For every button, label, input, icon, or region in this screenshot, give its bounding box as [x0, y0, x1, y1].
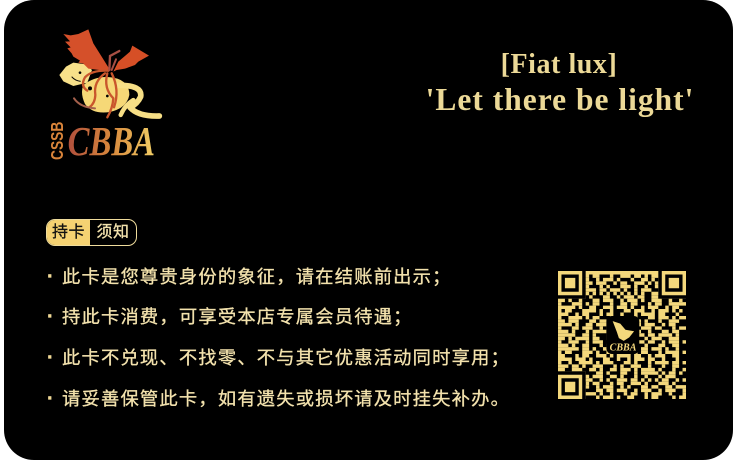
logo vertical tag: CSSB [47, 122, 67, 160]
notice line 2: 持此卡消费，可享受本店专属会员待遇； [62, 306, 413, 327]
notice line 2: · [47, 306, 54, 328]
notice line 3: 此卡不兑现、不找零、不与其它优惠活动同时享用； [62, 347, 510, 368]
phoenix left wing [63, 29, 109, 71]
QR centre logo: CBBA [610, 343, 637, 354]
notice line 1: 此卡是您尊贵身份的象征，请在结账前出示； [62, 266, 452, 287]
logo wordmark: CBBA [68, 119, 155, 165]
phoenix right wing [113, 46, 149, 72]
QR code [558, 271, 686, 399]
notice line 3: · [47, 347, 54, 369]
title: Let there be light: 'Let there be light' [426, 82, 694, 117]
notice line 1: · [47, 266, 54, 288]
notice line 4: · [47, 388, 54, 410]
logo: phoenix and CBBA [47, 29, 162, 165]
QR finder patterns [558, 271, 686, 399]
notice line 4: 请妥善保管此卡，如有遗失或损坏请及时挂失补办。 [62, 388, 510, 409]
phoenix tentacles [74, 51, 119, 117]
badge: card notice: 持卡 [52, 224, 85, 241]
badge: card notice [46, 219, 137, 246]
title: Fiat lux: [Fiat lux] [501, 49, 617, 80]
badge: card notice: 须知 [96, 224, 130, 241]
snake cloud [59, 63, 159, 116]
